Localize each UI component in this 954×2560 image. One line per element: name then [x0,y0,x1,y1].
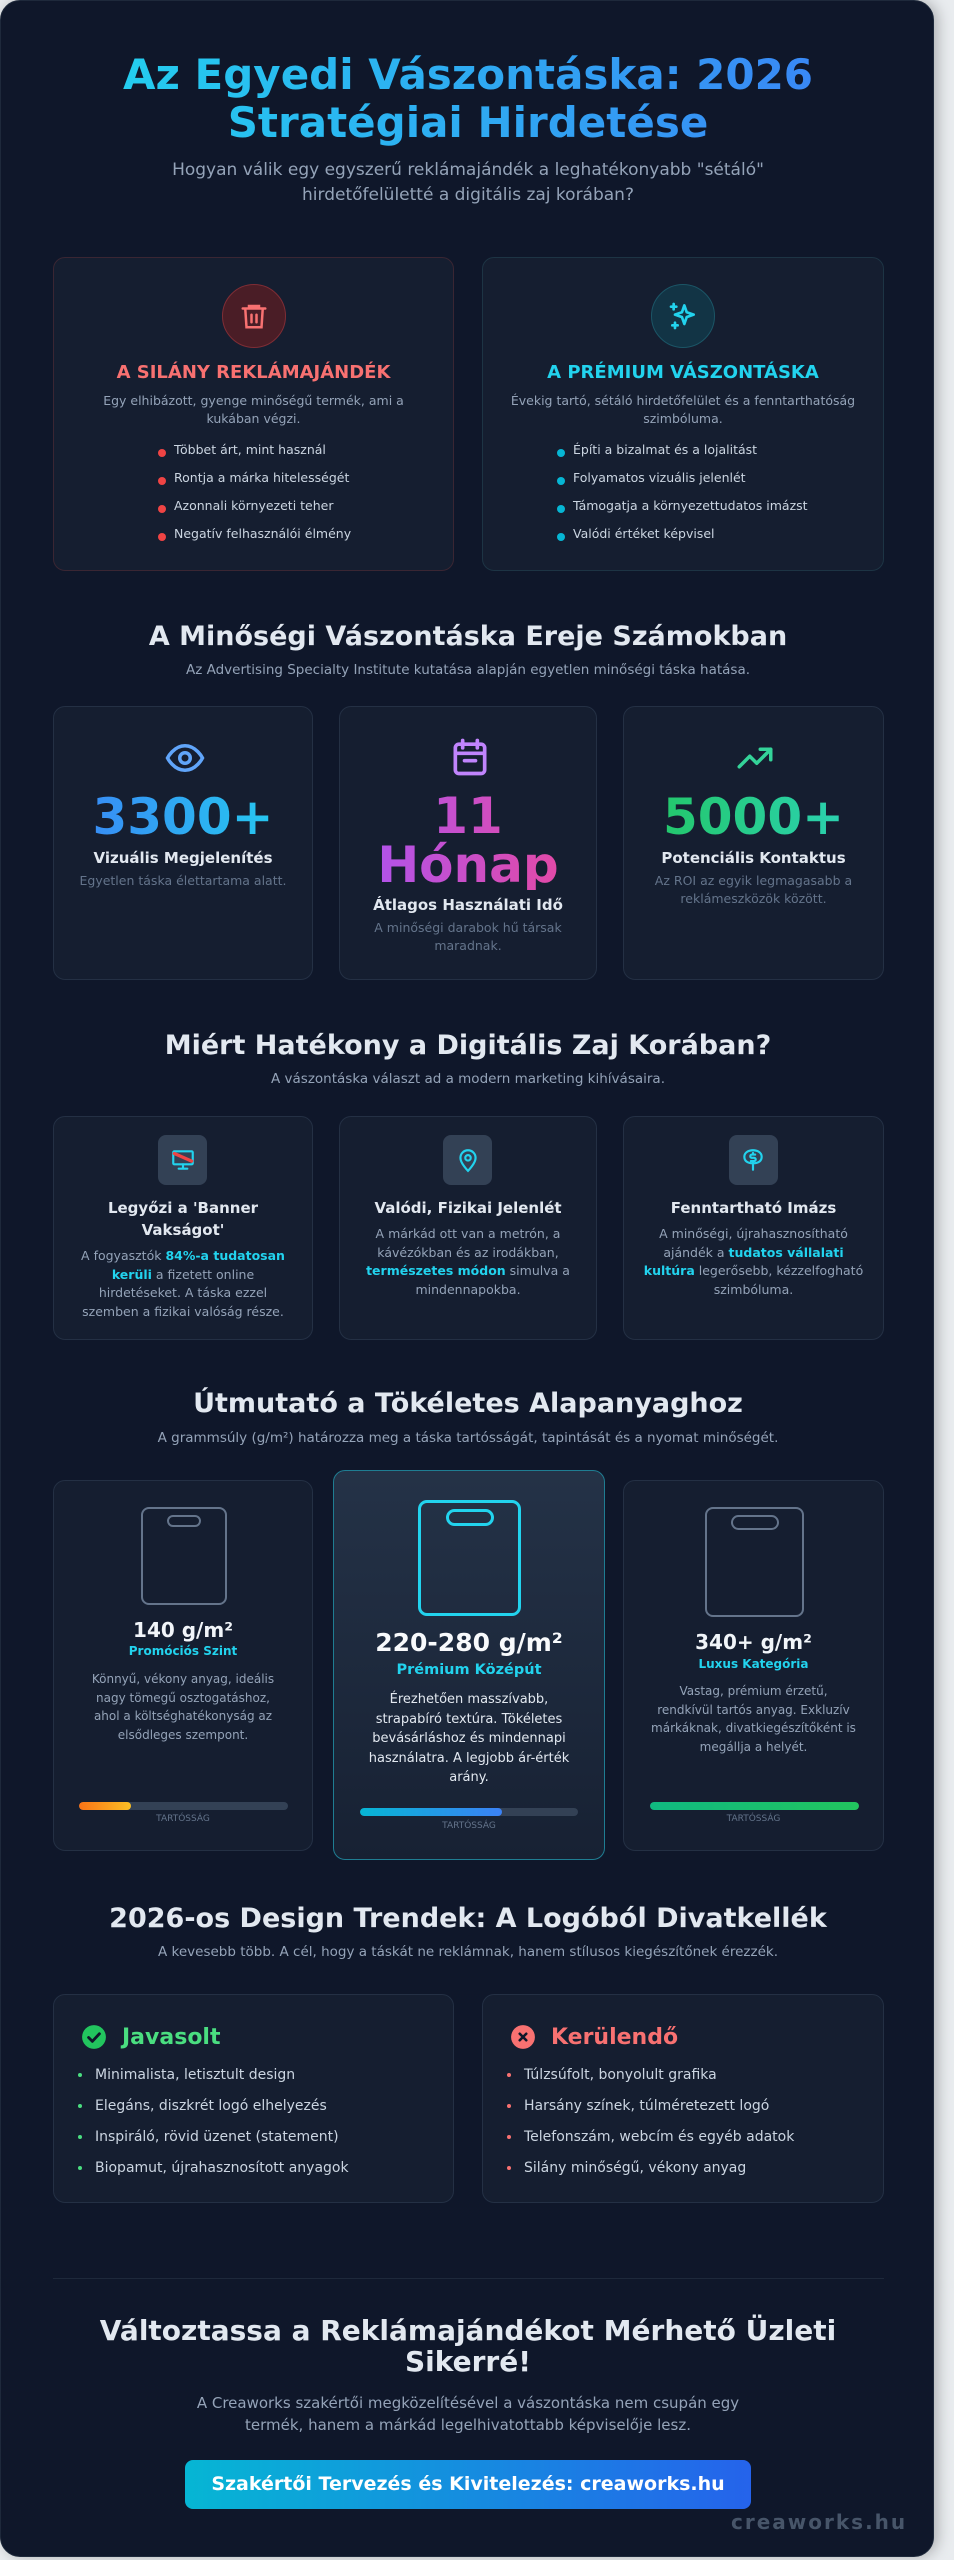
icon: monitor crossed [158,1135,207,1185]
list: Harsány színek, túlméretezett logó [524,2098,769,2114]
heading: javasolt: Javasolt [122,2024,220,2050]
CTA heading [100,2314,836,2378]
icon: calendar [454,738,486,776]
icon: bag outline [141,1507,227,1605]
icon: trash [222,284,286,348]
bullet list: Azonnali környezeti teher [174,498,334,513]
number: 5000+ [663,788,844,846]
bullet list: Támogatja a környezettudatos imázst [573,498,808,513]
card: 220-280 gsm [333,1470,605,1860]
icon: bag highlighted [418,1500,521,1616]
number [340,792,596,890]
bullet list: Negatív felhasználói élmény [174,526,351,541]
stat card: usage time [339,706,597,980]
weight: 140 g/m² [133,1618,233,1642]
bullet list: Valódi értéket képvisel [573,526,714,541]
subheading: A kevesebb több. A cél, hogy a táskát ne reklámnak, hanem stílusos kiegészítőnek érezzék. [158,1944,778,1960]
panel: avoid [482,1994,884,2203]
card: banner blindness [53,1116,313,1340]
icon: bag outline [705,1507,804,1617]
card: 140 gsm: TARTÓSSÁG [156,1814,210,1824]
title [108,1199,258,1239]
card: 220-280 gsm: Prémium Középút [396,1662,542,1678]
card: banner blindness: A fogyasztók 84%-a tudatosan kerüli a fizetett online hirdetéseket. A táska ezzel szemben a fizikai valóság része. [81,1248,285,1319]
heading: numbers: A Minőségi Vászontáska Ereje Számokban [149,621,787,652]
durability bar [360,1808,578,1816]
card: sustainable image: A minőségi, újrahasznosítható ajándék a tudatos vállalati kultúra legerősebb, kézzelfogható szimbóluma. [644,1226,863,1297]
subheading: A vászontáska választ ad a modern marketing kihívásaira. [271,1071,665,1087]
durability bar [79,1802,288,1810]
icon: eye [166,744,204,772]
icon: map pin [443,1135,492,1185]
heading: why effective: Miért Hatékony a Digitális Zaj Korában? [165,1030,771,1061]
bullet list: Rontja a márka hitelességét [174,470,349,485]
panel: recommended [53,1994,454,2203]
title: Fenntartható Imázs [671,1199,836,1217]
title: Stratégiai Hirdetése [228,98,708,147]
card: 220-280 gsm: Érezhetően masszívabb, strapabíró textúra. Tökéletes bevásárláshoz és mindennapi használatra. A legjobb ár-érték arány. [369,1692,569,1785]
heading: kerülendő: Kerülendő [551,2024,678,2050]
label: Potenciális Kontaktus [661,849,846,867]
label: Vizuális Megjelenítés [93,849,272,867]
list: Minimalista, letisztult design [95,2067,295,2083]
CTA heading: Változtassa a Reklámajándékot Mérhető Üzleti [100,2314,836,2347]
description: Egy elhibázott, gyenge minőségű termék, ami a kukában végzi. [103,393,404,426]
CTA button [185,2460,751,2509]
list [78,2067,349,2176]
title: Vakságot' [142,1221,224,1239]
number: Hónap [377,836,559,894]
heading: material guide: Útmutató a Tökéletes Alapanyaghoz [193,1388,743,1419]
weight: 220-280 g/m² [375,1628,563,1657]
number: 3300+ [92,788,274,846]
weight: 340+ g/m² [695,1630,812,1654]
CTA heading: Sikerré! [405,2345,531,2378]
card: physical presence [339,1116,597,1340]
label: Átlagos Használati Idő [373,896,563,914]
icon: sparkle [651,284,715,348]
card: physical presence: A márkád ott van a metrón, a kávézókban és az irodákban, természetes módon simulva a mindennapokba. [366,1226,570,1297]
number: 11 [433,787,503,845]
subtitle: Hogyan válik egy egyszerű reklámajándék a leghatékonyabb "sétáló" hirdetőfelületté a digitális zaj korában? [172,160,764,205]
stat card: impressions [53,706,313,980]
card: 340+ gsm [623,1480,884,1851]
durability bar [650,1802,859,1810]
list: Inspiráló, rövid üzenet (statement) [95,2129,339,2145]
card: 220-280 gsm: TARTÓSSÁG [442,1821,496,1831]
number [624,792,883,842]
description: Évekig tartó, sétáló hirdetőfelület és a fenntarthatóság szimbóluma. [511,393,855,426]
panel: premium bag [482,257,884,571]
card: 340+ gsm: Vastag, prémium érzetű, rendkívül tartós anyag. Exkluzív márkáknak, divatkiegészítőként is megállja a helyét. [651,1684,856,1754]
card: 340+ gsm: TARTÓSSÁG [727,1814,780,1824]
list: Telefonszám, webcím és egyéb adatok [524,2129,794,2145]
list: Túlzsúfolt, bonyolult grafika [524,2067,717,2083]
stat card: contacts [623,706,884,980]
card: 340+ gsm: Luxus Kategória [698,1657,809,1671]
heading: A SILÁNY REKLÁMAJÁNDÉK [117,362,390,383]
bullet list: Építi a bizalmat és a lojalitást [573,442,757,457]
panel: cheap gift [53,257,454,571]
subheading: Az Advertising Specialty Institute kutatása alapján egyetlen minőségi táska hatása. [186,662,750,678]
heading: A PRÉMIUM VÁSZONTÁSKA [547,362,819,383]
list: Silány minőségű, vékony anyag [524,2160,746,2176]
bullet list: Többet árt, mint használ [174,442,326,457]
title: Az Egyedi Vászontáska: 2026 [123,50,813,99]
bullet list [158,442,351,541]
icon: trending up [737,747,773,769]
bullet list [557,442,808,541]
CTA text: A Creaworks szakértői megközelítésével a vászontáska nem csupán egy termék, hanem a márkád legelhivatottabb képviselője lesz. [197,2394,739,2434]
list: Biopamut, újrahasznosított anyagok [95,2160,349,2176]
list [507,2067,794,2176]
watermark: creaworks.hu [731,2510,907,2534]
heading: design trends: 2026-os Design Trendek: A Logóból Divatkellék [109,1903,827,1934]
title: Valódi, Fizikai Jelenlét [374,1199,562,1217]
subheading: A grammsúly (g/m²) határozza meg a táska tartósságát, tapintását és a nyomat minőségét. [158,1430,778,1446]
stat card: impressions: Egyetlen táska élettartama alatt. [79,873,286,888]
icon: eco tree [728,1135,778,1185]
CTA button: Szakértői Tervezés és Kivitelezés: creaworks.hu [211,2473,725,2495]
number [54,792,312,842]
card: 140 gsm: Könnyű, vékony anyag, ideális nagy tömegű osztogatáshoz, ahol a költséghatékonyság az elsődleges szempont. [92,1672,274,1742]
title: Legyőzi a 'Banner [108,1199,258,1217]
card: 140 gsm [53,1480,313,1851]
stat card: usage time: A minőségi darabok hű társak maradnak. [374,920,562,953]
card: 140 gsm: Promóciós Szint [129,1644,237,1658]
list: Elegáns, diszkrét logó elhelyezés [95,2098,327,2114]
stat card: contacts: Az ROI az egyik legmagasabb a reklámeszközök között. [655,873,852,906]
card: sustainable image [623,1116,884,1340]
title [61,51,875,147]
bullet list: Folyamatos vizuális jelenlét [573,470,746,485]
